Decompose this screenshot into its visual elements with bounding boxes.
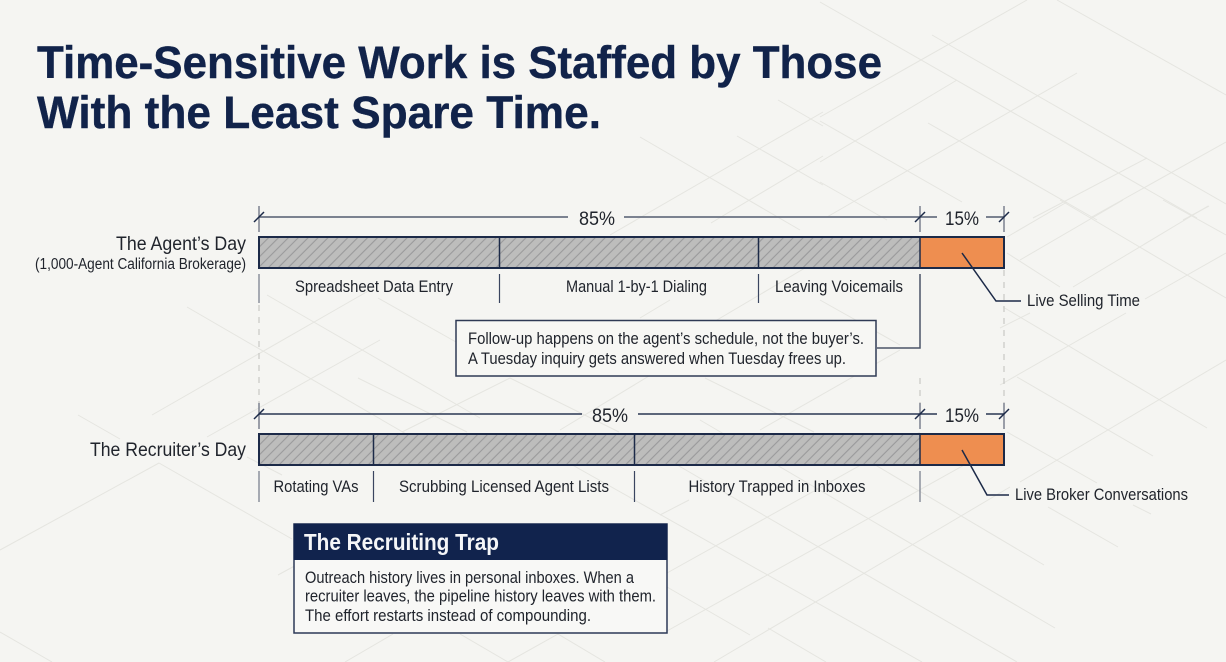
dashed guide lines	[259, 270, 1004, 403]
callout: live broker conversations: Live Broker Conversations	[1015, 486, 1188, 504]
agent dimension line	[254, 206, 1009, 232]
recruiter dimension line: 85%	[592, 405, 628, 427]
trap header	[294, 524, 668, 560]
recruiter dimension line	[254, 403, 1009, 429]
callout: follow-up note: A Tuesday inquiry gets answered when Tuesday frees up.	[468, 349, 846, 368]
trap body: recruiter leaves, the pipeline history leaves with them.	[305, 586, 656, 606]
trap body: The effort restarts instead of compounding.	[305, 606, 591, 625]
panel: the recruiting trap	[294, 524, 668, 633]
recruiter dimension line: 15%	[945, 405, 979, 427]
title	[37, 37, 882, 138]
agent bar	[259, 237, 1004, 268]
recruiter segment labels	[259, 471, 920, 502]
agent dimension line: 15%	[945, 208, 979, 230]
trap body: Outreach history lives in personal inboxes. When a	[305, 568, 635, 587]
panel: agent day	[35, 206, 1140, 376]
agent dimension line: 85%	[579, 208, 615, 230]
agent segment labels	[259, 274, 903, 303]
callout: live broker conversations	[962, 450, 1188, 504]
title: Time-Sensitive Work is Staffed by Those	[37, 37, 882, 88]
recruiter row label: The Recruiter’s Day	[90, 439, 246, 461]
agent row label	[35, 233, 246, 273]
trap heading: The Recruiting Trap	[304, 529, 499, 555]
agent segment labels: Leaving Voicemails	[775, 277, 903, 296]
agent row label: The Agent’s Day	[116, 233, 246, 255]
panel: recruiter day	[90, 403, 1188, 504]
callout: follow-up note: Follow-up happens on the agent’s schedule, not the buyer’s.	[468, 329, 864, 348]
agent segment labels: Manual 1-by-1 Dialing	[566, 277, 707, 296]
callout: live selling time	[962, 253, 1140, 310]
callout: follow-up note	[456, 274, 920, 376]
recruiter bar	[259, 434, 1004, 465]
trap body	[305, 568, 656, 625]
recruiter segment labels: Rotating VAs	[274, 477, 358, 496]
agent row label: (1,000-Agent California Brokerage)	[35, 256, 246, 273]
recruiter segment labels: History Trapped in Inboxes	[688, 477, 866, 496]
callout: live selling time: Live Selling Time	[1027, 292, 1140, 310]
recruiter segment labels: Scrubbing Licensed Agent Lists	[399, 477, 609, 496]
title: With the Least Spare Time.	[37, 87, 601, 138]
agent segment labels: Spreadsheet Data Entry	[295, 277, 454, 296]
